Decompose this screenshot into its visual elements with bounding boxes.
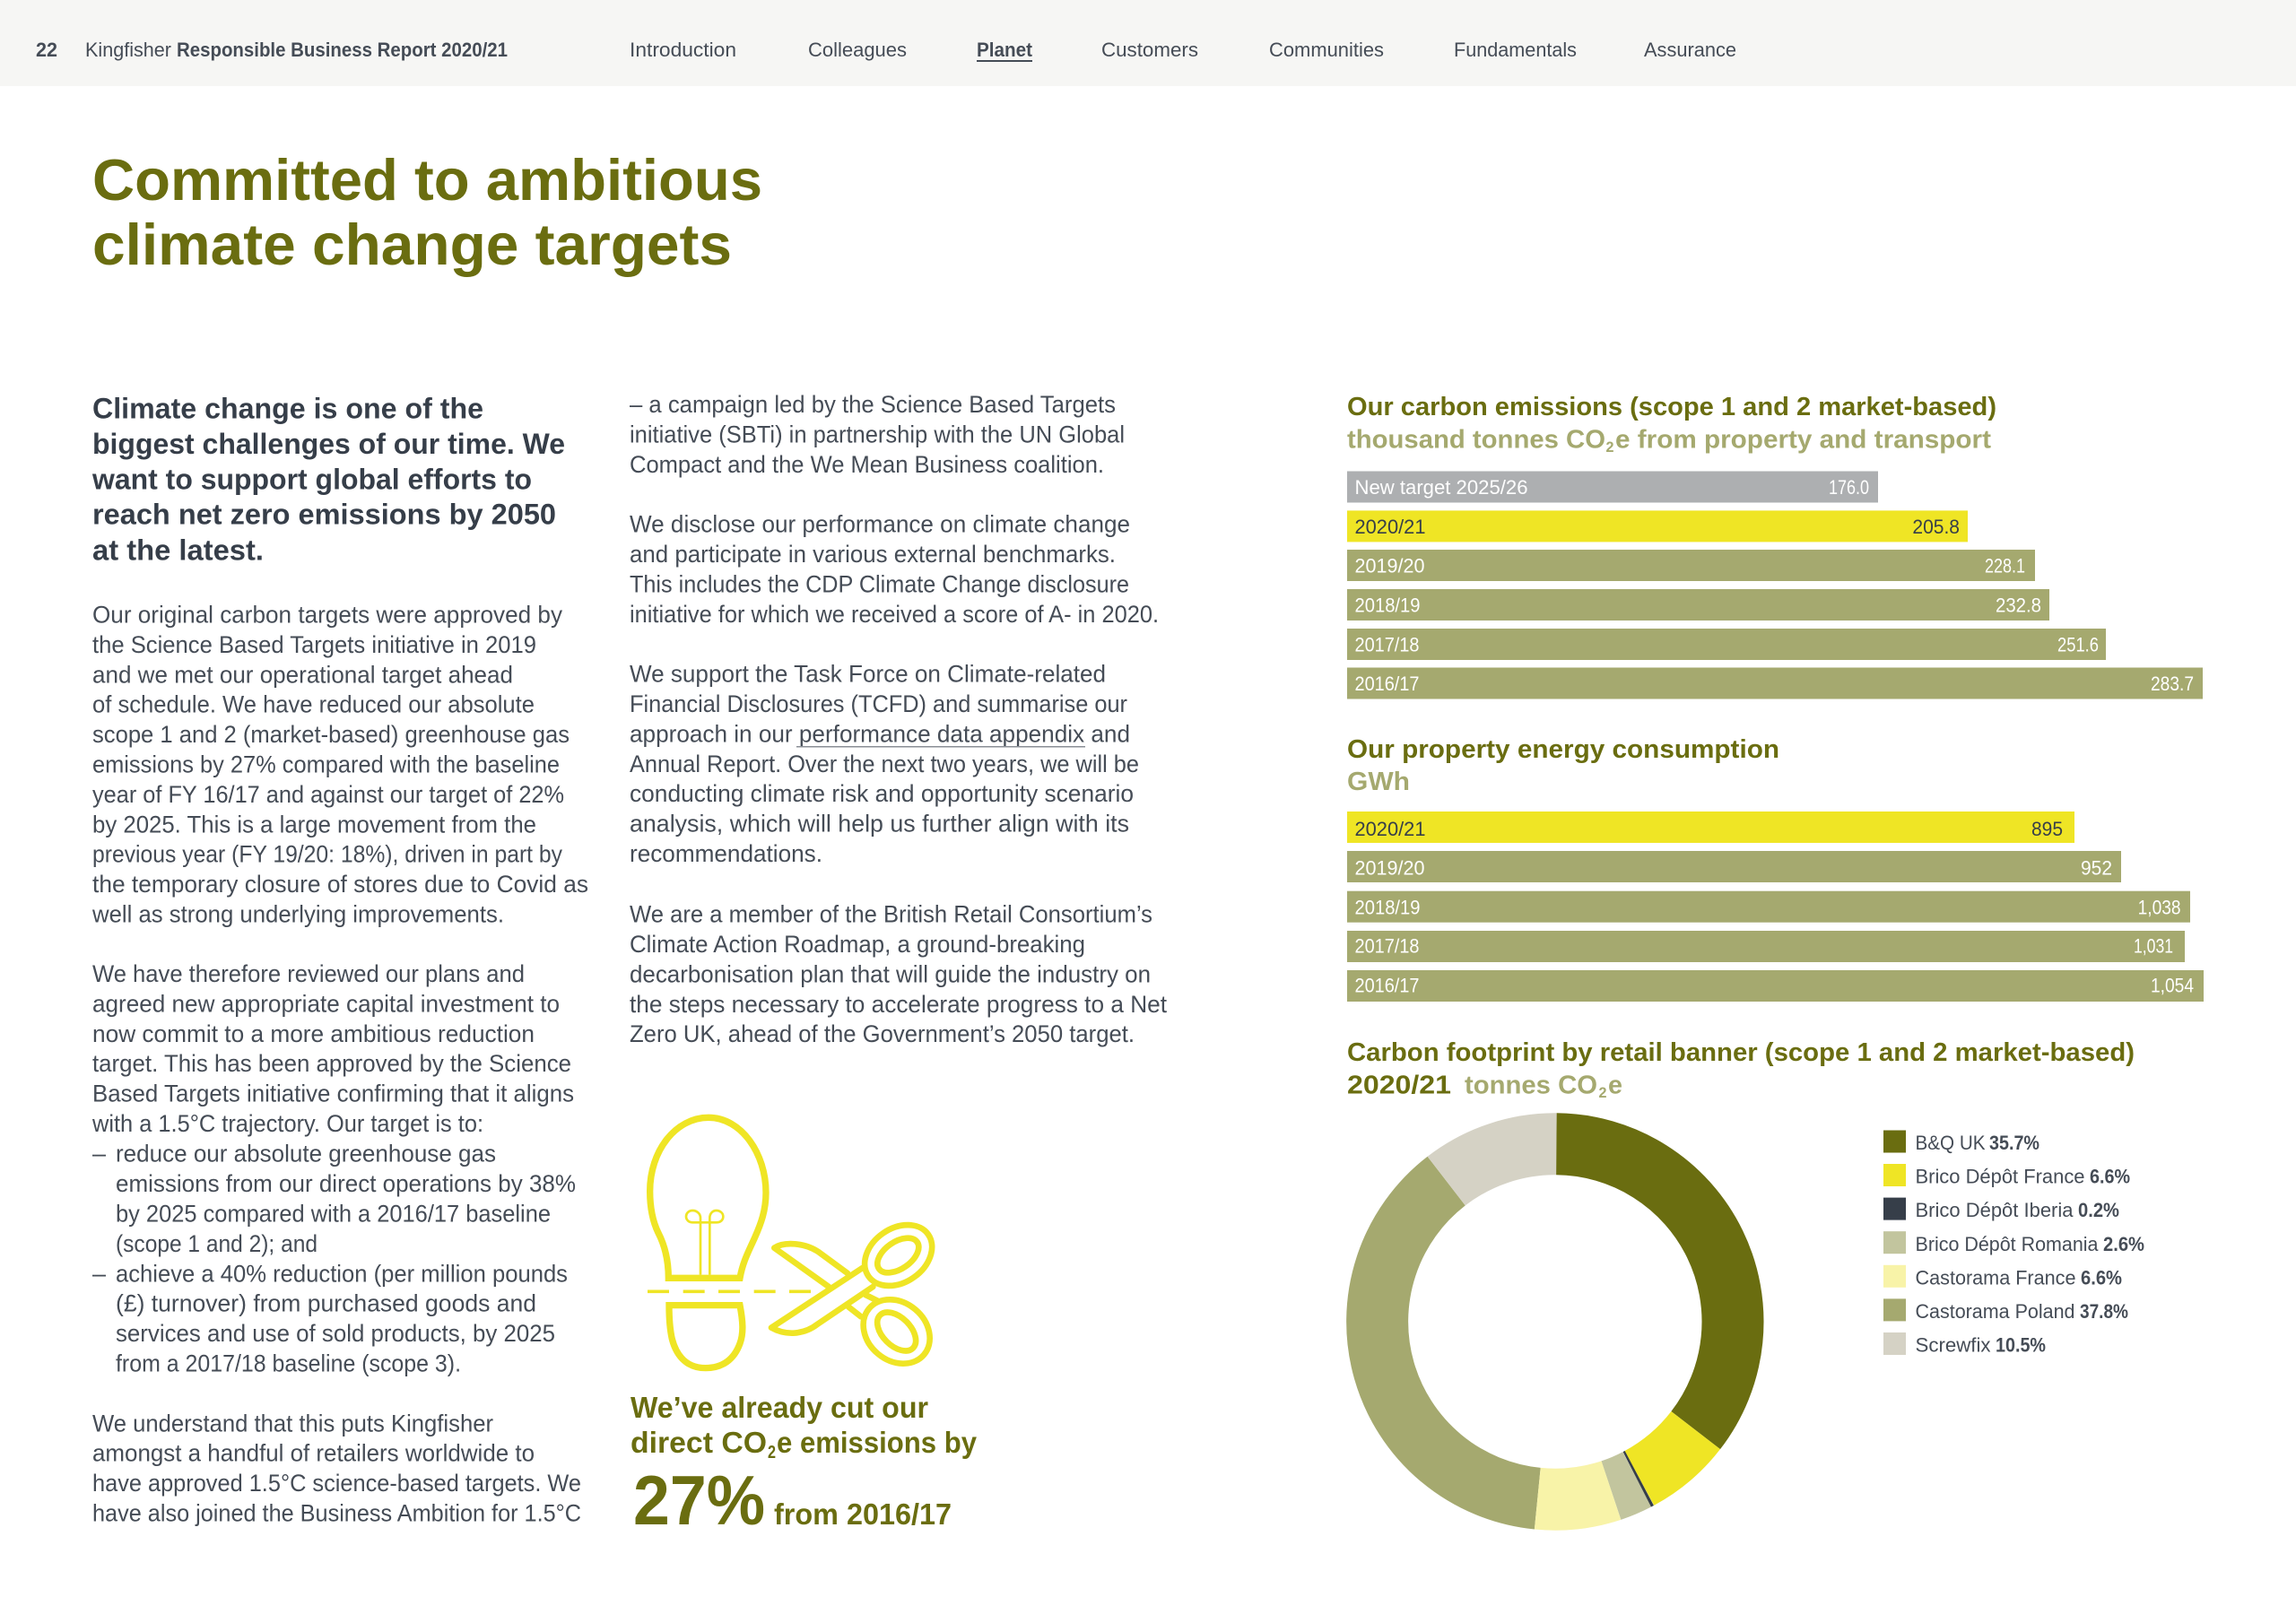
navigation: Colleagues [808,39,907,61]
legend: Castorama France [1916,1266,2075,1289]
icon part: bulb [648,1117,811,1368]
bar: 2017/18 [1347,931,2185,962]
donut chart [1378,1144,1733,1499]
navigation: Customers [1101,39,1198,61]
bar: new target [1347,472,1878,502]
bar: 2018/19: 2018/19 [1354,897,1421,918]
bar: 2017/18: 2017/18 [1354,633,1419,655]
bar: 2016/17 [1347,970,2204,1002]
legend: 2.6% [2103,1233,2144,1255]
bar: 2016/17 [1347,667,2203,699]
navigation: Introduction [630,39,736,61]
legend: 37.8% [2080,1300,2128,1323]
body text column 1: from a 2017/18 baseline (scope 3). [116,1350,461,1377]
heading: carbon emissions: thousand tonnes CO [1347,425,1605,454]
legend: Brico Dépôt Romania [1916,1233,2099,1255]
lead paragraph: biggest challenges of our time. We [92,428,565,460]
body text column 1: year of FY 16/17 and against our target of 22% [92,781,564,808]
legend: B&Q UK [1916,1132,1986,1154]
legend: 10.5% [1996,1334,2046,1357]
heading: carbon footprint by banner: Carbon footprint by retail banner (scope 1 and 2 market-based) [1347,1038,2135,1067]
body text column 1: and we met our operational target ahead [92,661,513,688]
bar: 2020/21: 2020/21 [1354,516,1426,538]
body text column 1: by 2025 compared with a 2016/17 baseline [116,1200,551,1227]
body text column 1: scope 1 and 2 (market-based) greenhouse gas [92,721,570,748]
heading: carbon footprint by banner: e [1608,1071,1622,1099]
body text column 2: recommendations. [630,840,822,867]
heading: carbon emissions: e from property and transport [1615,425,1991,454]
body text column 2: approach in our performance data appendix and [630,720,1130,747]
bar: 2020/21: 895 [2031,818,2063,840]
bar: 2019/20 [1347,550,2035,581]
title [92,147,762,277]
body text column 1: previous year (FY 19/20: 18%), driven in part by [92,841,563,868]
body text column 1: well as strong underlying improvements. [91,900,504,927]
heading: property energy [1347,735,1779,796]
bar: 2019/20 [1347,851,2121,882]
body text column 1: services and use of sold products, by 2025 [116,1320,555,1347]
body text column 1: (scope 1 and 2); and [116,1230,317,1257]
icon: light bulb cut by scissors [648,1117,944,1376]
body text column 1: emissions from our direct operations by 38% [116,1170,576,1197]
heading: carbon footprint by banner [1347,1038,2135,1101]
navigation [630,39,1736,62]
body text column 1: the Science Based Targets initiative in 2019 [92,631,536,658]
body text column 2: conducting climate risk and opportunity scenario [630,780,1134,807]
body text column 2: Annual Report. Over the next two years, we will be [630,751,1139,777]
body text column 2: analysis, which will help us further align with its [630,811,1129,838]
report name: Kingfisher [85,39,171,61]
lead paragraph: want to support global efforts to [91,463,532,495]
lead paragraph [91,393,565,567]
navigation: Fundamentals [1454,39,1577,61]
body text column 1: amongst a handful of retailers worldwide to [92,1440,535,1467]
body text column 1: reduce our absolute greenhouse gas [116,1141,496,1167]
legend: 6.6% [2081,1266,2122,1289]
heading: carbon footprint by banner: tonnes CO [1465,1071,1597,1099]
page number: 22 [36,39,57,61]
navigation: Assurance [1644,39,1736,61]
body text column 1: of schedule. We have reduced our absolute [92,691,535,718]
body text column 1: (£) turnover) from purchased goods and [116,1290,536,1317]
callout: 27% cut: 27% [633,1461,765,1540]
report name: Responsible Business Report 2020/21 [177,39,508,61]
body text column 1: Our original carbon targets were approved by [92,601,563,628]
body text column 2: – a campaign led by the Science Based Targets [630,391,1116,418]
legend: 0.2% [2078,1199,2119,1221]
body text column 1: target. This has been approved by the Science [92,1050,571,1077]
body text column 2: initiative for which we received a score of A- in 2020. [630,601,1159,628]
bar chart: carbon emissions [1347,472,2203,699]
heading: carbon emissions: Our carbon emissions (scope 1 and 2 market-based) [1347,393,1996,421]
icon part: scissors [771,1212,944,1376]
legend: Screwfix [1916,1334,1991,1357]
navigation: Planet [977,39,1033,61]
bar: 2018/19 [1347,891,2190,923]
title: Committed to ambitious [92,147,762,213]
callout: 27% cut: 2 [768,1443,776,1462]
legend: 35.7% [1989,1132,2039,1154]
body text column 2: We disclose our performance on climate change [630,511,1130,538]
header bar [0,0,2296,86]
body text column 1: now commit to a more ambitious reduction [92,1020,535,1047]
body text column 2: Compact and the We Mean Business coalition. [630,451,1104,478]
bar: 2018/19 [1347,589,2049,621]
body text column 1 [91,601,588,1526]
body text column 1: with a 1.5°C trajectory. Our target is to: [91,1110,483,1137]
callout: 27% cut: We’ve already cut our [631,1391,928,1424]
lead paragraph: at the latest. [92,534,264,567]
body text column 2: decarbonisation plan that will guide the industry on [630,960,1151,987]
legend: 6.6% [2090,1166,2130,1188]
bar: 2019/20: 2019/20 [1354,857,1424,879]
body text column 1: We understand that this puts Kingfisher [92,1410,493,1436]
bar: new target: New target 2025/26 [1354,476,1528,499]
bar chart: property energy [1347,812,2204,1002]
bar: 2016/17: 2016/17 [1354,673,1419,695]
legend [1883,1130,2144,1357]
body text column 1: by 2025. This is a large movement from the [92,811,536,838]
heading: carbon emissions [1347,393,1996,456]
heading: property energy: Our property energy consumption [1347,735,1779,764]
body text column 2: the steps necessary to accelerate progress to a Net [630,991,1168,1018]
bar: 2017/18: 2017/18 [1354,934,1419,958]
callout: 27% cut: e emissions by [777,1426,978,1459]
bar: 2019/20: 228.1 [1985,555,2025,577]
bar: 2020/21: 205.8 [1912,516,1960,538]
bar: 2019/20: 952 [2081,857,2112,879]
body text column 1: emissions by 27% compared with the baseline [92,751,560,778]
bar: 2016/17: 283.7 [2151,673,2194,695]
body text column 1: – [92,1141,106,1167]
body text column 1: have approved 1.5°C science-based targets. We [92,1470,581,1497]
bar: 2017/18: 1,031 [2134,934,2173,958]
heading: carbon footprint by banner: 2020/21 [1347,1071,1451,1099]
callout: 27% cut: from 2016/17 [774,1497,952,1531]
heading: carbon emissions: 2 [1605,438,1614,456]
bar: 2017/18: 251.6 [2057,633,2099,655]
lead paragraph: Climate change is one of the [92,393,483,425]
legend: Brico Dépôt France [1916,1166,2084,1188]
lead paragraph: reach net zero emissions by 2050 [92,499,556,531]
body text column 2 [630,391,1168,1047]
body text column 2: Climate Action Roadmap, a ground-breaking [630,931,1085,958]
bar: 2016/17: 2016/17 [1354,974,1419,997]
title: climate change targets [92,212,732,277]
callout: 27% cut: direct CO [631,1426,767,1459]
bar: 2016/17: 1,054 [2151,974,2194,997]
navigation: Communities [1269,39,1384,61]
bar: 2019/20: 2019/20 [1354,555,1424,577]
body text column 1: – [92,1260,106,1287]
bar: 2020/21: 2020/21 [1354,818,1426,840]
body text column 1: We have therefore reviewed our plans and [92,960,525,987]
body text column 2: Financial Disclosures (TCFD) and summarise our [630,690,1127,717]
body text column 1: have also joined the Business Ambition for 1.5°C [92,1499,581,1526]
bar: 2018/19: 232.8 [1996,594,2041,617]
bar: 2018/19: 1,038 [2138,897,2181,918]
body text column 2: Zero UK, ahead of the Government’s 2050 target. [630,1020,1135,1047]
bar: 2020/21 [1347,812,2074,843]
body text column 2: initiative (SBTi) in partnership with the UN Global [630,421,1125,447]
bar: 2017/18 [1347,629,2106,660]
bar: new target: 176.0 [1829,476,1869,499]
heading: property energy: GWh [1347,768,1410,796]
body text column 2: and participate in various external benchmarks. [630,541,1116,568]
legend: Brico Dépôt Iberia [1916,1199,2074,1221]
body text column 2: We support the Task Force on Climate-related [630,661,1106,688]
legend: Castorama Poland [1916,1300,2075,1323]
body text column 2: We are a member of the British Retail Consortium’s [630,900,1152,927]
bar: 2018/19: 2018/19 [1354,594,1421,617]
body text column 1: agreed new appropriate capital investment to [92,990,560,1017]
body text column 1: the temporary closure of stores due to Covid as [92,871,588,898]
callout: 27% cut [631,1391,978,1540]
body text column 2: This includes the CDP Climate Change disclosure [630,570,1129,597]
body text column 1: achieve a 40% reduction (per million pounds [116,1260,568,1287]
body text column 1: Based Targets initiative confirming that it aligns [92,1081,574,1107]
heading: carbon footprint by banner: 2 [1598,1084,1607,1101]
bar: 2020/21 [1347,510,1968,542]
